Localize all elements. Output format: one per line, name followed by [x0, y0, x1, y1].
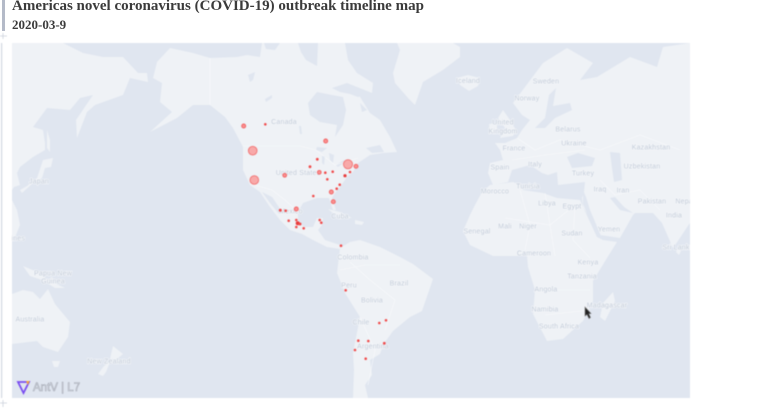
Eurasia [488, 43, 690, 248]
country labels: Papua New [34, 270, 73, 278]
country labels: India [666, 212, 682, 220]
left guide bar [2, 0, 5, 31]
AntV L7 logo: AntV | L7 [33, 382, 80, 394]
country labels: Madagascar [587, 302, 628, 310]
country labels: Tunisia [516, 184, 540, 190]
country labels: Egypt [563, 204, 581, 210]
country labels: Namibia [531, 306, 559, 314]
inland seas and channels [248, 43, 630, 232]
country labels: Japan [29, 178, 49, 186]
Australia [12, 289, 70, 352]
country labels: Turkey [572, 170, 594, 178]
country labels: Chile [353, 320, 369, 326]
country labels: United [492, 120, 514, 126]
country labels: South Africa [539, 324, 579, 330]
country labels: Iraq [594, 186, 606, 194]
country borders [210, 58, 680, 385]
country labels: Bolivia [361, 298, 383, 304]
country labels: Brazil [390, 280, 409, 288]
country labels: Pakistan [638, 198, 666, 206]
country labels: Niger [519, 224, 537, 230]
country labels: Yemen [598, 226, 620, 234]
country labels: Sri Lanka [662, 244, 694, 252]
country labels: Nepal [675, 198, 695, 206]
country labels: Ukraine [561, 140, 587, 148]
land masses [12, 43, 690, 398]
country labels: Cuba [331, 214, 349, 220]
country labels: Colombia [337, 254, 369, 262]
Africa [463, 182, 617, 341]
Madagascar [600, 292, 615, 321]
country labels: Tanzania [567, 274, 597, 280]
UK and Ireland [498, 111, 514, 138]
country labels: Iran [617, 188, 629, 194]
country labels: Libya [538, 200, 556, 208]
country labels: Argentina [357, 344, 389, 350]
outbreak points: large [248, 146, 352, 184]
country labels: Canada [271, 119, 297, 126]
date subtitle: 2020-03-9 [12, 17, 66, 32]
New Guinea [24, 267, 63, 288]
South America [337, 240, 433, 398]
country labels: Kenya [578, 260, 598, 266]
icon: mouse cursor [585, 307, 591, 318]
country labels: Spain [491, 164, 509, 172]
Iceland [458, 75, 478, 90]
country labels: Uzbekistan [624, 164, 660, 170]
Cuba and Hispaniola [330, 210, 340, 214]
country labels: Sudan [561, 230, 583, 238]
Sri Lanka [676, 250, 680, 254]
country labels: Guinea [41, 278, 65, 286]
country labels: New Zealand [87, 358, 131, 366]
country labels: Iceland [456, 78, 480, 85]
country labels: Kingdom [488, 128, 518, 136]
country labels: Italy [528, 162, 542, 168]
country labels: France [502, 146, 526, 152]
outbreak points: small [264, 123, 387, 360]
outbreak points: medium [242, 124, 358, 211]
country labels: Angola [534, 286, 558, 294]
Russia far east [12, 43, 148, 190]
country labels: Peru [341, 282, 357, 290]
country labels: United States [276, 170, 321, 177]
country labels: Norway [515, 96, 540, 102]
country labels: Mexico [279, 208, 303, 216]
Greenland [393, 43, 460, 105]
country labels: Kazakhstan [632, 144, 670, 152]
country labels: Cameroon [517, 250, 551, 258]
country labels: Sweden [533, 78, 559, 86]
country labels: Australia [15, 316, 45, 324]
New Zealand [110, 347, 122, 359]
North America [150, 43, 397, 249]
country labels: Senegal [463, 228, 491, 236]
country labels: Belarus [555, 126, 581, 134]
country labels [0, 78, 695, 366]
country labels: Morocco [481, 188, 509, 196]
country labels: Mali [498, 224, 512, 230]
